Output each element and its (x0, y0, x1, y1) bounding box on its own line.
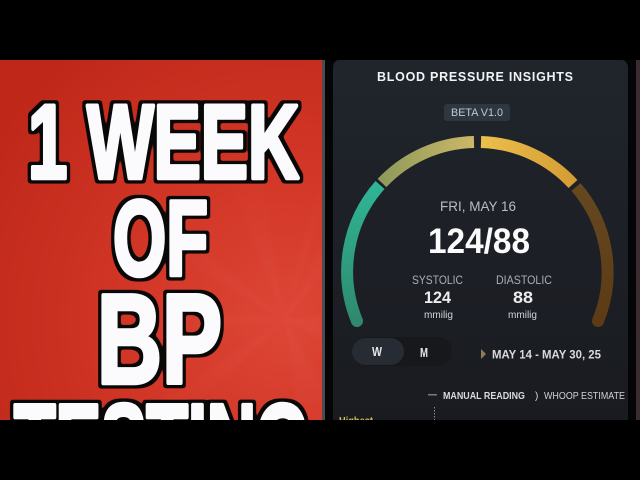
chart: dotted axis line (434, 407, 436, 420)
stat: diastolic (496, 275, 552, 321)
legend: manual reading / whoop estimate: MANUAL READING (443, 391, 525, 402)
gauge segment: olive (382, 142, 474, 183)
stat: systolic (412, 275, 463, 321)
toggle: week / month (352, 337, 452, 366)
legend: manual reading / whoop estimate: ) (535, 391, 538, 402)
background: red sunburst panel (0, 60, 323, 420)
gauge: blood pressure arc (347, 142, 608, 327)
badge: Beta v1.0: BETA V1.0 (451, 107, 503, 119)
title line: 1 WEEK: 1 WEEK (28, 84, 299, 201)
badge: Beta v1.0 (444, 104, 510, 121)
chart label: Highest: Highest (339, 415, 373, 427)
toggle: week / month: M (420, 345, 428, 360)
letterbox: top bar (0, 0, 640, 60)
title: 1 WEEK OF BP TESTING (14, 84, 309, 480)
stat: diastolic: 88 (513, 288, 533, 307)
stat: systolic: 124 (424, 288, 452, 307)
legend: manual reading / whoop estimate: WHOOP ESTIMATE (544, 391, 625, 402)
stat: systolic: mmilig (424, 310, 453, 321)
reading: 124/88: 124/88 (428, 222, 530, 261)
panel: blood pressure insights screen (333, 60, 628, 427)
toggle: week / month: W (372, 344, 383, 359)
stat: diastolic: mmilig (508, 310, 537, 321)
phone frame (322, 60, 640, 420)
gauge segment: teal (347, 185, 380, 321)
letterbox: bottom bar (0, 420, 640, 480)
stat: systolic: SYSTOLIC (412, 275, 463, 287)
stat: diastolic: DIASTOLIC (496, 275, 552, 287)
heading: Blood Pressure Insights: BLOOD PRESSURE INSIGHTS (377, 70, 573, 84)
gauge segment: brown (576, 187, 608, 321)
gauge segment: yellow (481, 142, 573, 184)
title line: BP: BP (97, 268, 222, 410)
title line: OF: OF (113, 178, 208, 298)
date: Fri, May 16: FRI, MAY 16 (440, 198, 516, 214)
legend: manual reading / whoop estimate (428, 391, 625, 402)
date range: May 14 - May 30, 25: MAY 14 - MAY 30, 25 (492, 348, 601, 362)
